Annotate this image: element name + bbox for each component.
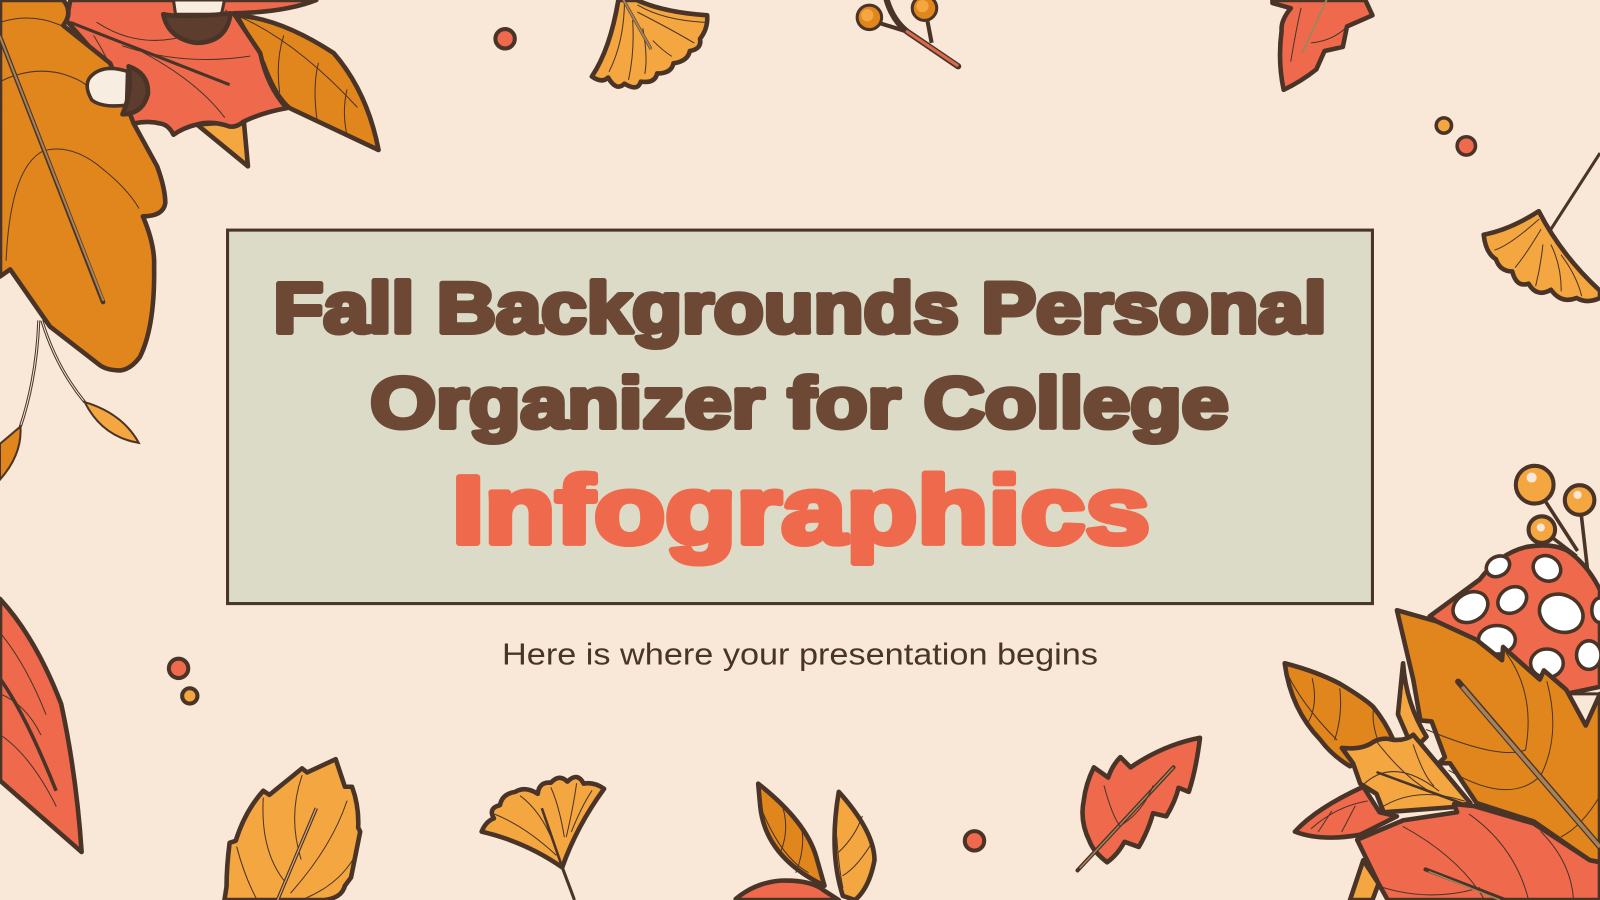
heading line 3: Infographics: Infographics <box>452 457 1150 564</box>
orange leaf: left <box>1285 663 1393 766</box>
heading line 1: Fall Backgrounds Personal <box>273 269 1327 349</box>
acorn: top <box>163 0 231 43</box>
mushroom cap <box>1430 545 1600 726</box>
small orange tip: bottom <box>1350 860 1379 900</box>
orange leaf: upper right <box>237 15 379 150</box>
title panel <box>228 230 1372 604</box>
decorative dots: top right <box>1436 118 1476 155</box>
large orange leaf <box>0 0 165 370</box>
decorative dot: bottom <box>965 831 984 851</box>
big red leaf <box>1357 804 1600 900</box>
big orange leaf <box>1397 610 1600 862</box>
berry twig: top <box>857 0 958 66</box>
leaf: bottom left red <box>0 599 82 852</box>
decorative dot: top <box>495 29 515 48</box>
leaf cluster: top left <box>0 0 379 480</box>
orange sliver behind leaves <box>1398 663 1427 750</box>
red maple leaf <box>66 0 316 135</box>
panel background <box>228 230 1372 604</box>
decorative dots: lower left <box>169 659 197 704</box>
leaf cluster: bottom right <box>1285 466 1600 900</box>
leaf: bottom red maple <box>1078 738 1200 870</box>
light orange maple leaf <box>1342 735 1470 812</box>
leaf sprig: bottom centre <box>736 784 874 900</box>
light orange leaf tip <box>197 121 248 166</box>
leaf: right ginkgo <box>1484 153 1600 301</box>
leaf: bottom left orange <box>224 759 360 900</box>
acorn: middle <box>87 66 148 114</box>
leaf: top ginkgo <box>592 0 707 87</box>
stems with small hanging leaves <box>0 320 139 480</box>
red leaf: small left <box>1295 787 1397 838</box>
heading line 2: Organizer for College <box>370 364 1229 444</box>
subtitle: Here is where your presentation begins <box>502 637 1098 671</box>
leaf: bottom ginkgo <box>482 777 604 900</box>
leaf: top right maple <box>1272 0 1372 90</box>
berries <box>1516 466 1594 571</box>
